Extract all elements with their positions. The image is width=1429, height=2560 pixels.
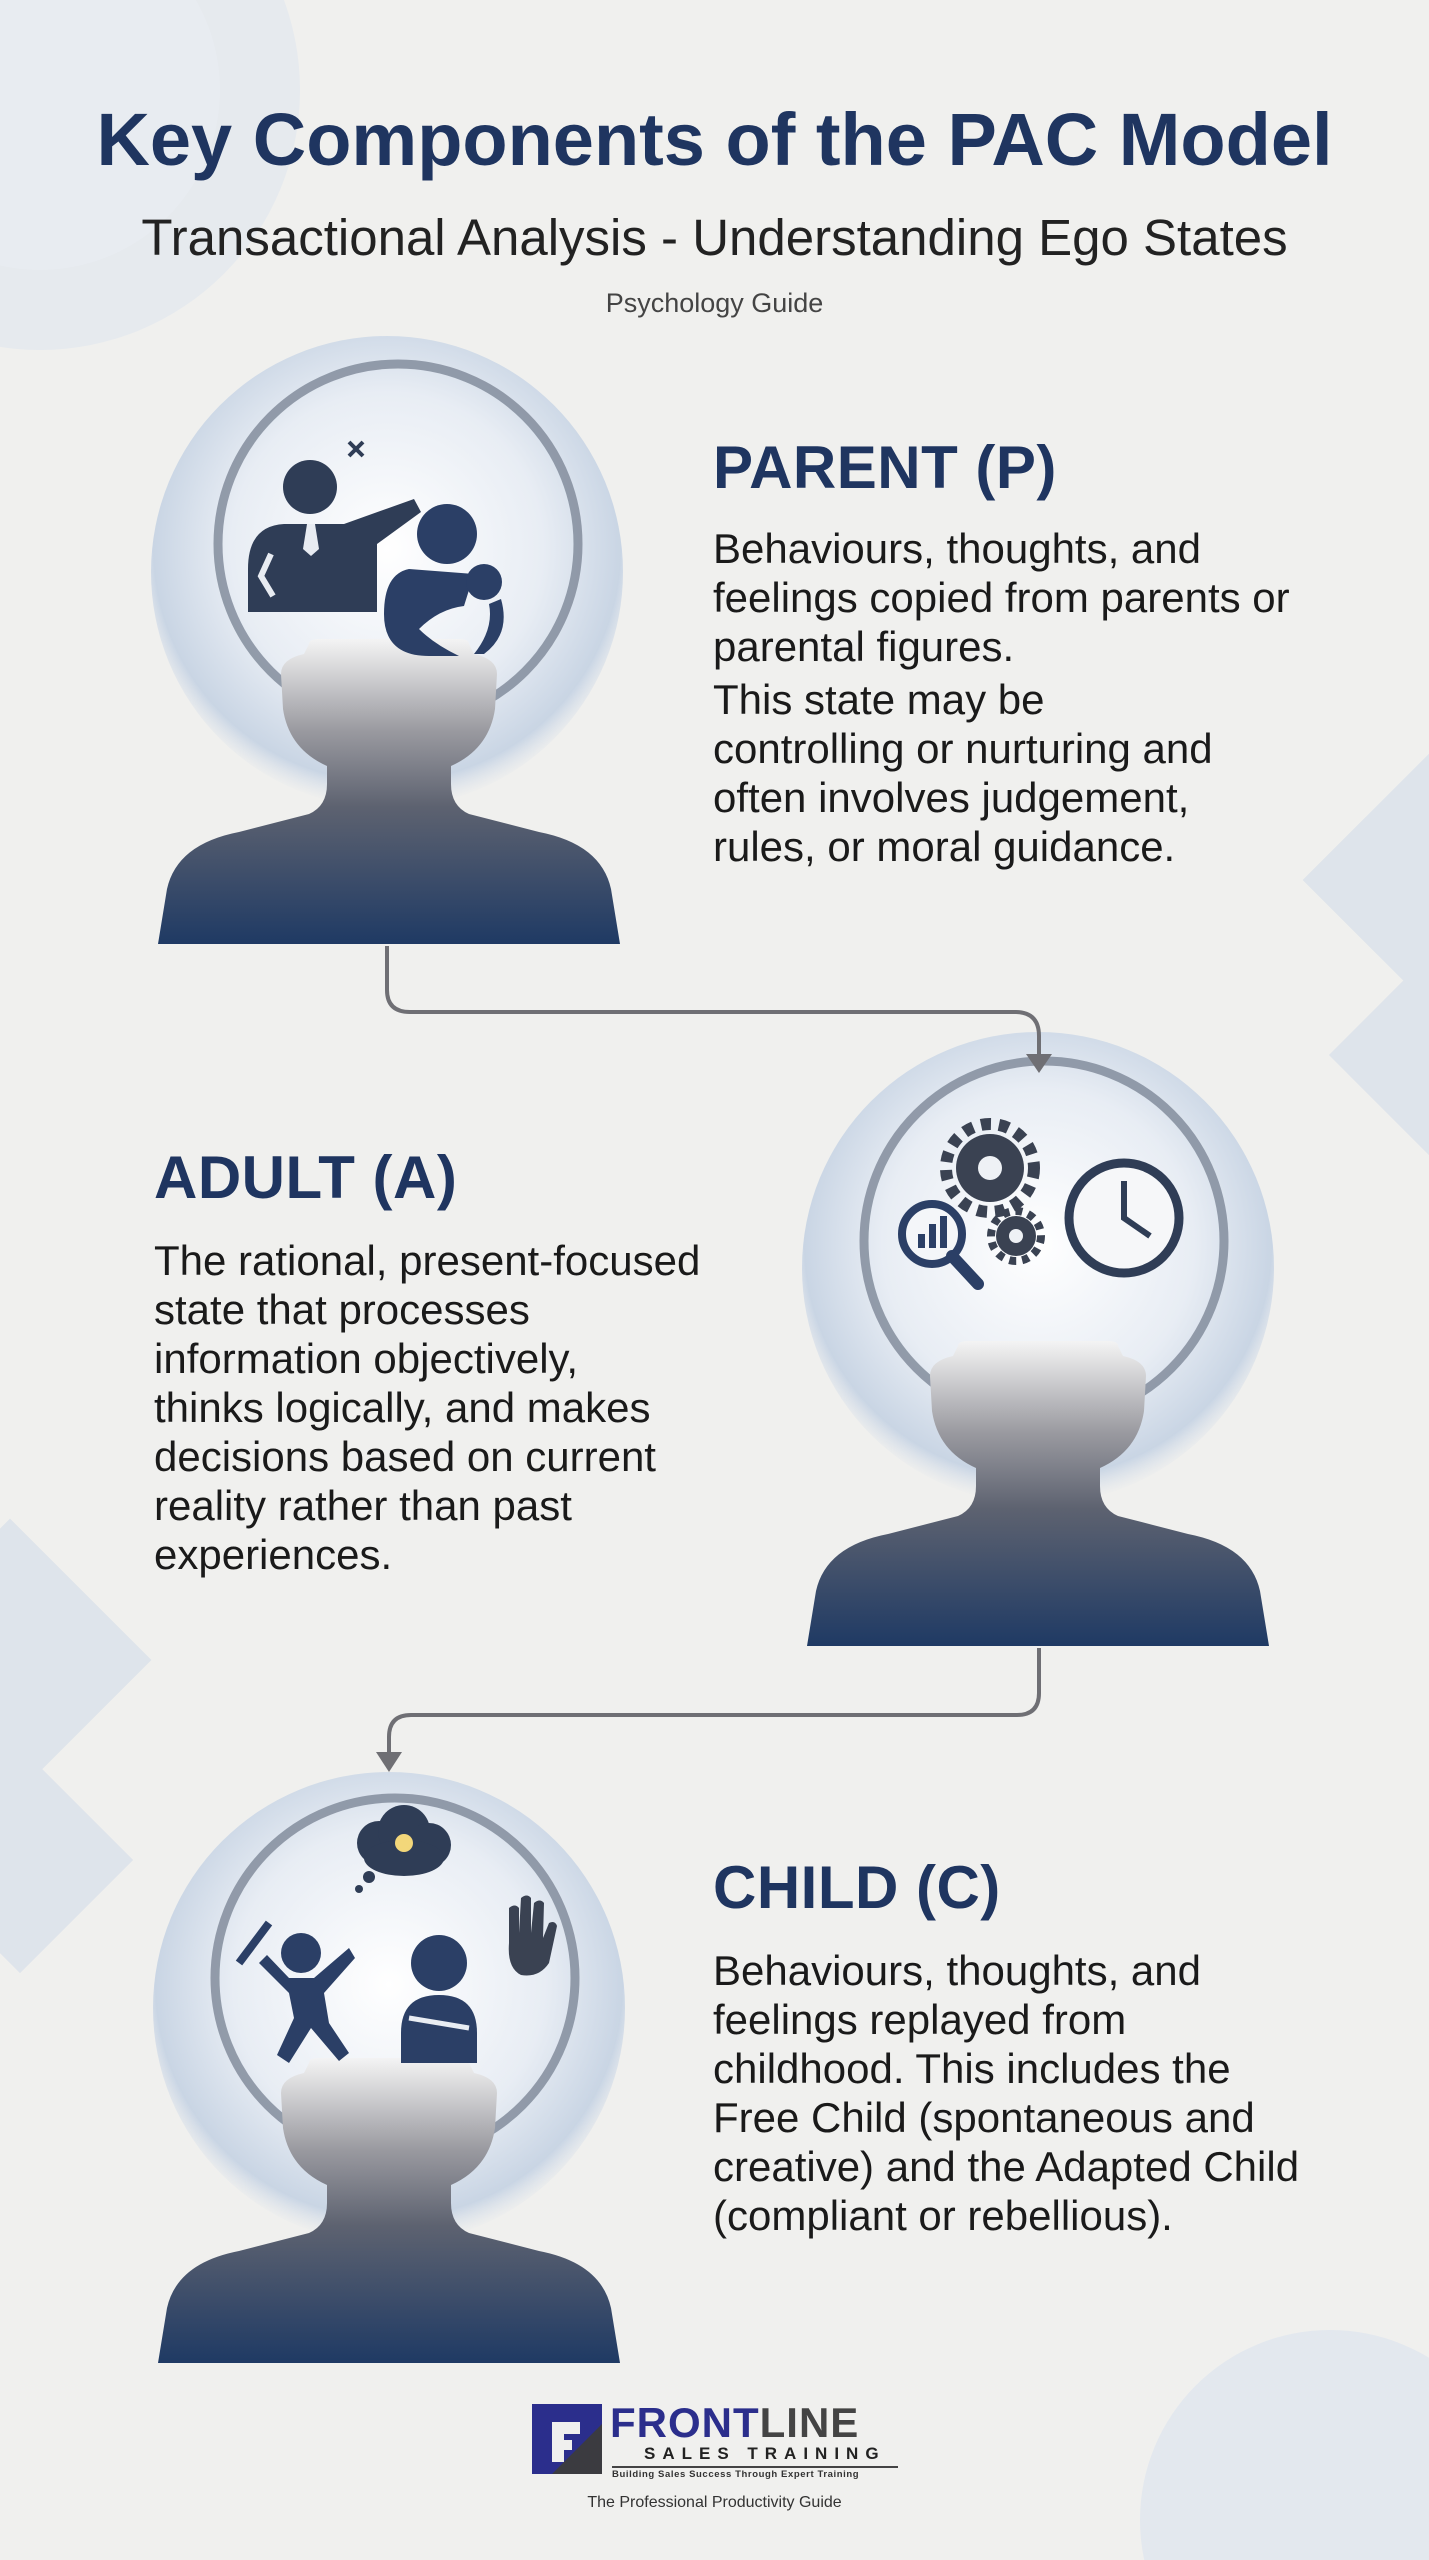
icon: clock <box>1069 1163 1179 1273</box>
text: parent description: often involves judgement, <box>713 774 1189 821</box>
icon: magnifier chart <box>902 1204 978 1284</box>
heading: adult: ADULT (A) <box>154 1144 457 1211</box>
footer logo <box>532 2399 898 2480</box>
figure: adult <box>802 1032 1274 1646</box>
connector: adult to child <box>376 1648 1039 1772</box>
icon: crossed-arms child <box>401 1935 477 2063</box>
connector: parent to adult <box>387 946 1052 1073</box>
figure: child <box>153 1772 625 2363</box>
icon: F logo mark <box>532 2404 602 2474</box>
footer logo: FRONTLINE <box>610 2399 859 2446</box>
text: parent description: parental figures. <box>713 623 1014 670</box>
text: adult description <box>154 1237 700 1578</box>
title: Key Components of the PAC Model <box>96 98 1333 181</box>
icon: thought cloud <box>355 1805 451 1893</box>
text: child description: childhood. This includes the <box>713 2045 1231 2092</box>
heading: parent: PARENT (P) <box>713 434 1057 501</box>
text: adult description: state that processes <box>154 1286 530 1333</box>
guide label: Psychology Guide <box>606 288 823 318</box>
icon: gears <box>946 1124 1041 1261</box>
text: parent description <box>713 525 1290 870</box>
figure: parent <box>151 336 623 944</box>
footer logo: Building Sales Success Through Expert Training <box>612 2469 859 2480</box>
text: child description: Behaviours, thoughts, and <box>713 1947 1201 1994</box>
text: adult description: information objectively, <box>154 1335 578 1382</box>
text: child description: (compliant or rebellious). <box>713 2192 1173 2239</box>
text: parent description: feelings copied from parents or <box>713 574 1290 621</box>
icon: stop hand <box>509 1896 557 1976</box>
text: adult description: The rational, present-focused <box>154 1237 700 1284</box>
text: adult description: reality rather than past <box>154 1482 572 1529</box>
text: parent description: rules, or moral guidance. <box>713 823 1175 870</box>
footer tagline: The Professional Productivity Guide <box>587 2494 842 2511</box>
icon: angry pointing man <box>248 442 421 612</box>
text: child description: Free Child (spontaneous and <box>713 2094 1255 2141</box>
text: adult description: decisions based on current <box>154 1433 656 1480</box>
text: child description: creative) and the Adapted Child <box>713 2143 1299 2190</box>
text: parent description: This state may be <box>713 676 1044 723</box>
text: child description: feelings replayed from <box>713 1996 1126 2043</box>
text: parent description: controlling or nurturing and <box>713 725 1213 772</box>
icon: mother and baby <box>384 504 504 656</box>
text: child description <box>713 1947 1299 2239</box>
text: adult description: experiences. <box>154 1531 392 1578</box>
text: parent description: Behaviours, thoughts, and <box>713 525 1201 572</box>
footer logo: SALES TRAINING <box>644 2444 886 2463</box>
icon: jumping child <box>239 1923 355 2063</box>
subtitle: Transactional Analysis - Understanding Ego States <box>141 209 1288 266</box>
text: adult description: thinks logically, and makes <box>154 1384 650 1431</box>
heading: child: CHILD (C) <box>713 1854 1001 1921</box>
